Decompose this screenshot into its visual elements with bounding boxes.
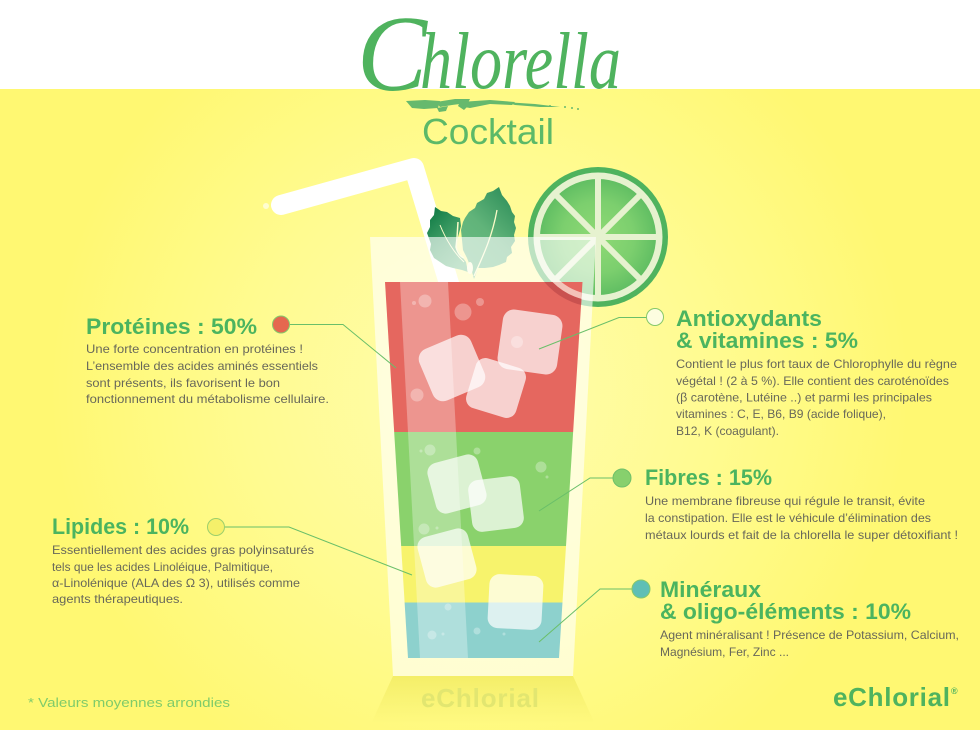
panel: Lipides: [52, 514, 412, 606]
heading: [660, 577, 911, 624]
body: B12, K (coagulant).: [676, 424, 779, 438]
connector: [281, 324, 396, 368]
dot: [646, 308, 664, 326]
panel: Minéraux: [539, 577, 959, 659]
body: Magnésium, Fer, Zinc ...: [660, 645, 789, 659]
body: tels que les acides Linoléique, Palmitique,: [52, 560, 273, 574]
heading: Protéines : 50%: [86, 314, 257, 339]
icon: lime slice: [528, 167, 668, 307]
body: [660, 628, 959, 659]
body: métaux lourds et fait de la chlorella le super détoxifiant !: [645, 528, 958, 542]
body: [52, 543, 314, 606]
layer: minerals teal: [404, 602, 562, 658]
body: vitamines : C, E, B6, B9 (acide folique),: [676, 407, 886, 421]
glass: [370, 237, 596, 676]
body: la constipation. Elle est le véhicule d’élimination des: [645, 511, 931, 525]
bubbles: [410, 294, 548, 640]
body: [86, 342, 329, 406]
heading: & vitamines : 5%: [676, 328, 858, 353]
logo: eChlorial: ®: [951, 686, 958, 696]
title script word: hlorella: [420, 18, 621, 106]
brush stroke: [406, 99, 579, 112]
layer: proteins red: [380, 282, 590, 432]
subtitle: Cocktail: [422, 111, 554, 152]
body: Une membrane fibreuse qui régule le transit, évite: [645, 494, 925, 508]
heading: [676, 306, 858, 353]
straw through the liquid: [400, 282, 468, 658]
connector: [539, 318, 647, 349]
straw: [263, 168, 451, 290]
body: fonctionnement du métabolisme cellulaire.: [86, 392, 329, 406]
body: (β carotène, Lutéine ..) et parmi les principales: [676, 390, 932, 404]
body: végétal ! (2 à 5 %). Elle contient des caroténoïdes: [676, 374, 949, 388]
title: [357, 0, 621, 152]
heading: Antioxydants: [676, 306, 822, 331]
body: [645, 494, 958, 542]
body: agents thérapeutiques.: [52, 592, 183, 606]
watermark logo: eChlorial: [421, 683, 539, 713]
footnote: * Valeurs moyennes arrondies: [28, 695, 231, 710]
panel: Protéines: [86, 314, 396, 406]
panel: Fibres: [539, 465, 958, 542]
heading: Lipides : 10%: [52, 514, 189, 539]
liquid layers: [385, 282, 582, 658]
connector: [539, 478, 622, 511]
panel: Antioxydants: [539, 306, 957, 438]
body: sont présents, ils favorisent le bon: [86, 376, 280, 390]
ice cubes: [415, 308, 564, 630]
heading: Fibres : 15%: [645, 465, 772, 490]
heading: & oligo-éléments : 10%: [660, 599, 911, 624]
icon: mint leaves: [427, 187, 516, 279]
heading: Minéraux: [660, 577, 762, 602]
glass base shadow: [371, 676, 595, 724]
connector: [539, 589, 641, 642]
dot: [632, 580, 650, 598]
dot: [613, 469, 631, 487]
body: α-Linolénique (ALA des Ω 3), utilisés comme: [52, 576, 300, 590]
body: Agent minéralisant ! Présence de Potassium, Calcium,: [660, 628, 959, 642]
connector: [216, 527, 412, 575]
body: Contient le plus fort taux de Chlorophylle du règne: [676, 357, 957, 371]
dot: [272, 316, 290, 333]
logo: eChlorial: eChlorial: [833, 682, 950, 712]
body: Essentiellement des acides gras polyinsaturés: [52, 543, 314, 557]
layer: lipids yellow: [401, 546, 566, 602]
body: [676, 357, 957, 438]
layer: fibres green: [394, 432, 574, 546]
dot: [208, 518, 224, 536]
lime through the liquid: [544, 282, 582, 305]
body: Une forte concentration en protéines !: [86, 342, 303, 356]
body: L’ensemble des acides aminés essentiels: [86, 359, 318, 373]
title script word: [357, 0, 621, 114]
